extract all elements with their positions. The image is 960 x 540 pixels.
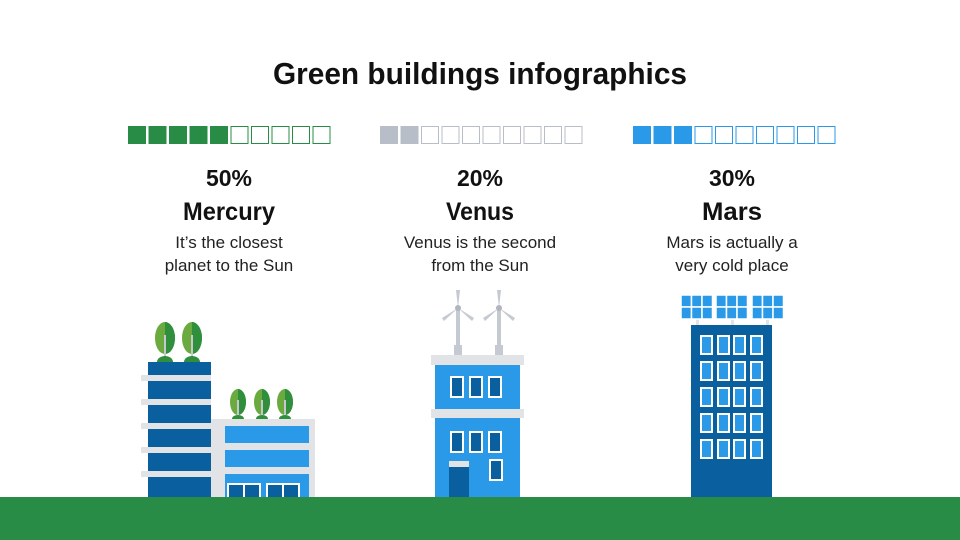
progress squares: venus [380,126,582,144]
text block: mercury: Mercury [183,198,275,226]
text block: mars: 30% [709,165,755,191]
wind turbines [442,290,515,357]
small trees [230,389,293,423]
building: mars [681,295,784,497]
text block: mars: Mars is actually a [666,233,798,252]
text block: mercury: 50% [206,165,252,191]
text block: venus [404,165,556,275]
text block: mercury [165,165,293,275]
text block: venus: Venus is the second [404,233,556,252]
text block: mars [666,165,798,275]
text block: mars: very cold place [675,256,789,275]
title: Green buildings infographics [273,56,687,91]
ground [0,497,960,540]
text block: venus: Venus [446,198,514,226]
text block: venus: 20% [457,165,503,191]
text block: mars: Mars [702,198,762,226]
building: mercury [141,322,315,498]
trees on tall tower [155,322,202,368]
text block: venus: from the Sun [431,256,529,275]
text block: mercury: planet to the Sun [165,256,293,275]
text block: mercury: It’s the closest [175,233,283,252]
progress squares: mars [634,126,835,144]
building: venus [431,290,524,497]
solar panels [681,295,784,326]
progress squares: mercury [128,126,330,144]
